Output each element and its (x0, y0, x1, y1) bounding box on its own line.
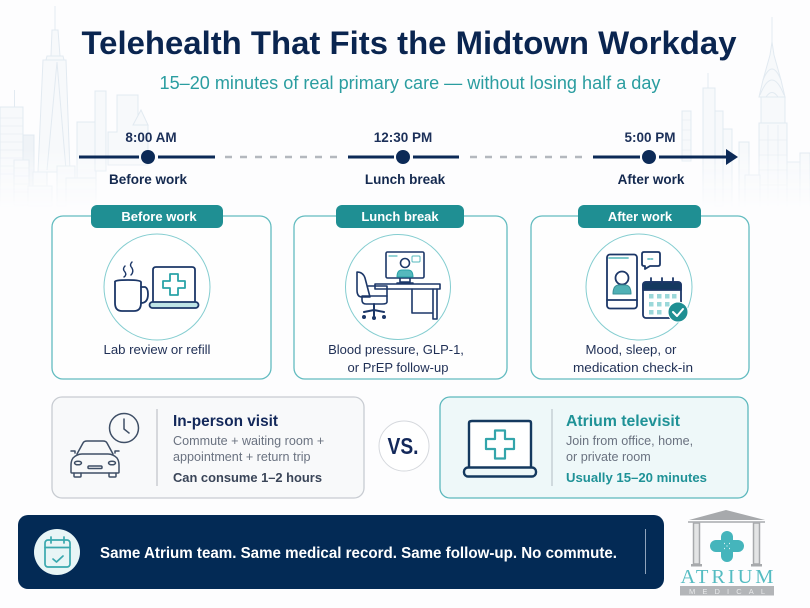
icon: coffee mug and laptop (115, 262, 198, 311)
badge: before work (91, 205, 223, 228)
icon: desk with video call monitor (357, 252, 440, 320)
badge: after work (578, 205, 701, 228)
logo: atrium medical: MEDICAL (689, 587, 765, 596)
logo: atrium medical: ATRIUM (680, 566, 774, 588)
timeline stop: 8:00 AM (109, 130, 187, 187)
timeline (79, 130, 738, 187)
badge: before work: Before work (121, 209, 197, 224)
skyline: right (682, 17, 810, 191)
timeline stop: 12:30 PM: Lunch break (365, 172, 446, 187)
banner text: Same Atrium team. Same medical record. Same follow-up. No commute. (100, 545, 617, 562)
label: mood and sleep check-in: Mood, sleep, or (586, 342, 677, 357)
panel: lunch break (294, 205, 507, 379)
text: in-person details (173, 413, 324, 485)
timeline stop: 12:30 PM: 12:30 PM (374, 130, 432, 145)
logo: atrium medical (680, 510, 774, 596)
text: televisit details: Atrium televisit (566, 413, 681, 430)
skyline: left (0, 6, 148, 208)
panel: in-person visit (52, 397, 364, 498)
text: in-person details: In-person visit (173, 413, 279, 430)
label: blood pressure follow-up: Blood pressure, GLP-1, (328, 342, 464, 357)
panel: before work (52, 205, 271, 379)
title: Telehealth That Fits the Midtown Workday (82, 25, 736, 61)
label: mood and sleep check-in: medication check-in (573, 360, 693, 375)
text: in-person details: appointment + return trip (173, 450, 311, 464)
text: televisit details (566, 413, 707, 485)
subtitle: 15–20 minutes of real primary care — without losing half a day (160, 73, 660, 93)
label: blood pressure follow-up: or PrEP follow-up (348, 360, 448, 375)
banner (18, 515, 664, 589)
badge: lunch break: Lunch break (361, 209, 439, 224)
icon: calendar check (34, 529, 80, 575)
icon: car and clock (71, 414, 138, 477)
text: televisit details: Join from office, home, (566, 434, 693, 448)
timeline stop: 5:00 PM: After work (618, 172, 685, 187)
text: in-person details: Can consume 1–2 hours (173, 470, 322, 485)
timeline stop: 5:00 PM: 5:00 PM (624, 130, 676, 145)
vs badge: VS. (388, 433, 418, 459)
label: lab review: Lab review or refill (103, 342, 211, 357)
badge: lunch break (336, 205, 464, 228)
timeline stop: 12:30 PM (365, 130, 446, 187)
text: televisit details: or private room (566, 450, 651, 464)
panel: atrium televisit (440, 397, 748, 498)
timeline stop: 5:00 PM (618, 130, 685, 187)
arrow head (726, 149, 738, 165)
icon: laptop with cross (464, 421, 536, 476)
badge: after work: After work (608, 209, 673, 224)
text: televisit details: Usually 15–20 minutes (566, 470, 707, 485)
icon: phone, chat bubble, calendar (607, 252, 688, 322)
timeline stop: 8:00 AM: Before work (109, 172, 187, 187)
vs badge (379, 421, 429, 471)
text: in-person details: Commute + waiting room + (173, 434, 324, 448)
timeline stop: 8:00 AM: 8:00 AM (125, 130, 177, 145)
panel: after work (531, 205, 749, 379)
